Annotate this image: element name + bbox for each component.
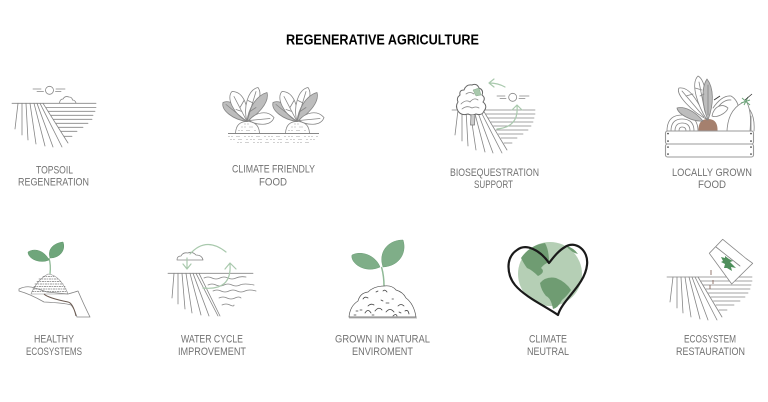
panel: water cycle improvement [168,244,256,358]
arrow: lower green [497,105,522,129]
heart outline [508,245,587,315]
seed bag [709,239,753,284]
seed drips [710,270,713,289]
label: CLIMATE [529,334,567,346]
label [232,164,316,189]
icon: tree, field, sun and green cycle arrows [452,79,535,153]
label [676,334,745,358]
label [26,334,82,358]
label: WATER CYCLE [181,334,243,346]
arrow: upper green [489,79,505,87]
icon: globe in heart [508,242,587,315]
icon: cloud [177,252,203,260]
label: ECOSYSTEMS [26,346,82,358]
sprout [49,258,50,274]
panel: topsoil regeneration [12,86,96,189]
hand [19,287,90,317]
panel: climate friendly food [223,88,324,189]
icon: brown root vegetable [698,119,718,131]
label: LOCALLY GROWN [672,167,752,179]
panel: ecosystem restauration [667,239,753,358]
label [527,334,569,358]
continents [521,243,549,276]
soil pile [31,274,68,294]
icon: two root plants in soil [223,88,324,142]
label: SUPPORT [474,179,513,191]
label: HEALTHY [34,334,75,346]
icon: green tree on bag [721,256,736,271]
panel: locally grown food [666,76,754,191]
label: FOOD [259,177,287,189]
label [335,334,430,358]
panel: healthy ecosystems [19,242,90,358]
label: TOPSOIL [36,164,73,176]
panel: grown in natural environment [335,240,430,358]
globe [518,242,582,306]
arrow: down [183,258,191,269]
panel: biosequestration support [450,79,539,191]
label: NEUTRAL [527,346,569,358]
title: REGENERATIVE AGRICULTURE [286,32,479,48]
label: IMPROVEMENT [178,346,246,358]
label: REGENERATION [18,177,89,189]
icon: hand holding soil and sprout [19,242,90,317]
label [18,164,89,189]
label: CLIMATE FRIENDLY [232,164,316,176]
arrow: top arc [190,244,226,254]
label: ENVIROMENT [352,346,413,358]
label: FOOD [698,179,726,191]
icon: field with sun and cloud [12,86,96,147]
label [178,334,246,358]
icon: sprout in soil mound [349,240,417,318]
icon: field and seed bag [667,239,753,320]
icon: crate planks [666,131,754,144]
icon: field, water waves, cloud and green arrows [168,244,256,316]
panel: climate neutral [508,242,587,358]
icon: vegetable crate [666,76,754,157]
label [450,167,539,191]
label: ECOSYSTEM [684,334,736,346]
label: RESTAURATION [676,346,745,358]
label [672,167,752,191]
label: BIOSEQUESTRATION [450,167,539,179]
label: GROWN IN NATURAL [335,334,430,346]
icon: tree [456,84,486,115]
arrow: up curve [203,263,236,288]
